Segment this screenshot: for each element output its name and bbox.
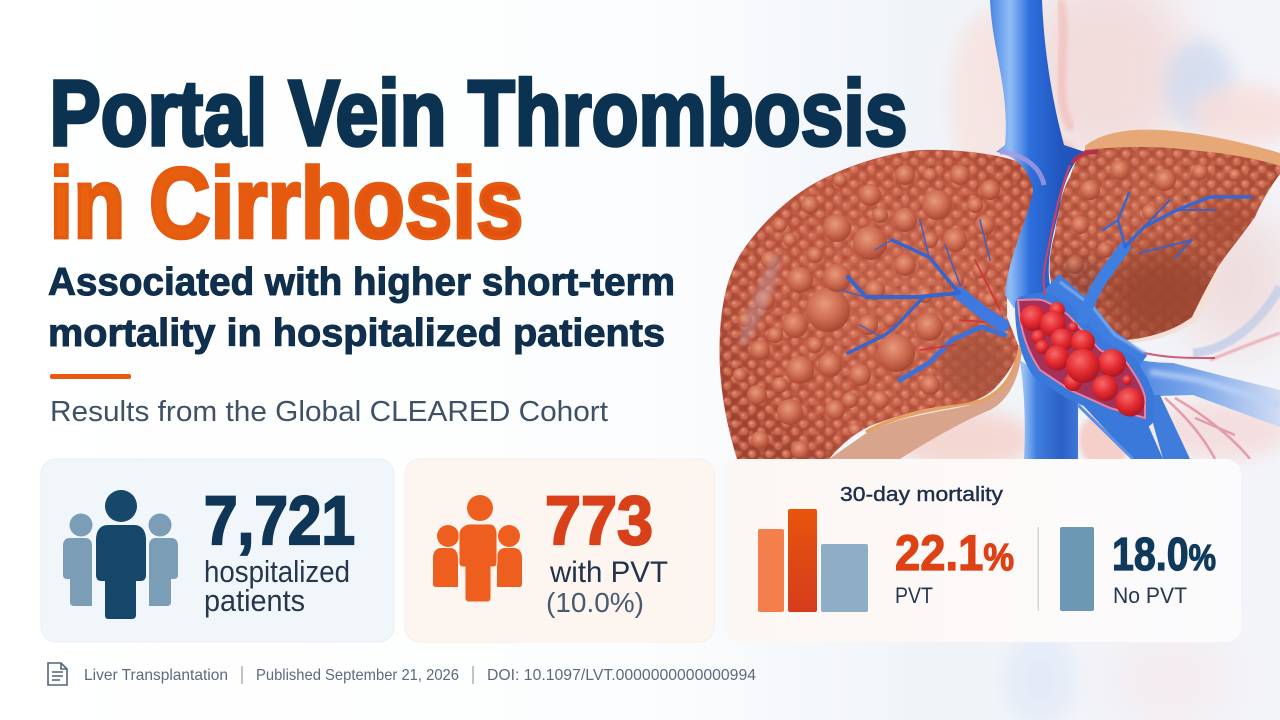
subtitle [48,261,675,355]
left lobe vein branches [840,220,1005,380]
label: hospitalized patients [204,554,350,618]
footer citation: Published September 21, 2026 [256,667,459,684]
left liver lobe [710,140,1040,465]
icon: document [48,663,67,685]
panel: 30-day mortality [725,459,1241,642]
label: hospitalized patients: hospitalized [204,554,350,589]
footer citation: Liver Transplantation [84,667,228,684]
title: in Cirrhosis [50,148,524,260]
title: Portal Vein Thrombosis [50,61,908,165]
label: with PVT: with PVT [549,556,668,589]
bar chart: PVT [758,509,868,612]
title [50,61,908,260]
icon: PVT group [433,495,522,602]
statistic: 22.1% PVT: PVT [895,583,933,608]
main portal vein [990,0,1280,459]
liver illustration [710,0,1280,465]
label: hospitalized patients: patients [204,583,305,618]
footer citation: DOI: 10.1097/LVT.0000000000000994 [487,667,756,684]
right lobe vein branches [1083,193,1251,318]
icon: patient group [63,490,178,619]
gallbladder rim [1085,130,1280,166]
clot in vein [1018,300,1145,418]
statistic: 7,721: 7,721 [204,482,355,559]
panel: hospitalized patients [41,459,394,642]
statistic: 18.0% No PVT: No PVT [1113,583,1187,608]
label: 10.0%: (10.0%) [546,587,644,618]
panel: patients with PVT [405,459,714,642]
chart heading: 30-day mortality [840,484,1003,506]
statistic: 22.1% PVT: 22.1% [895,525,1014,581]
study source line: Results from the Global CLEARED Cohort [50,396,608,428]
right side veins and streams [1140,287,1280,459]
footer citation [48,663,756,685]
statistic: 18.0% No PVT: 18.0% [1112,528,1216,580]
statistic: 18.0% No PVT [1112,528,1216,608]
right liver lobe [1050,147,1280,343]
statistic: 773: 773 [545,482,653,559]
subtitle: mortality in hospitalized patients [48,312,665,355]
statistic: 22.1% PVT [895,525,1014,608]
subtitle: Associated with higher short-term [48,261,675,304]
bar: no PVT [1060,527,1094,611]
accent rule [50,374,131,379]
